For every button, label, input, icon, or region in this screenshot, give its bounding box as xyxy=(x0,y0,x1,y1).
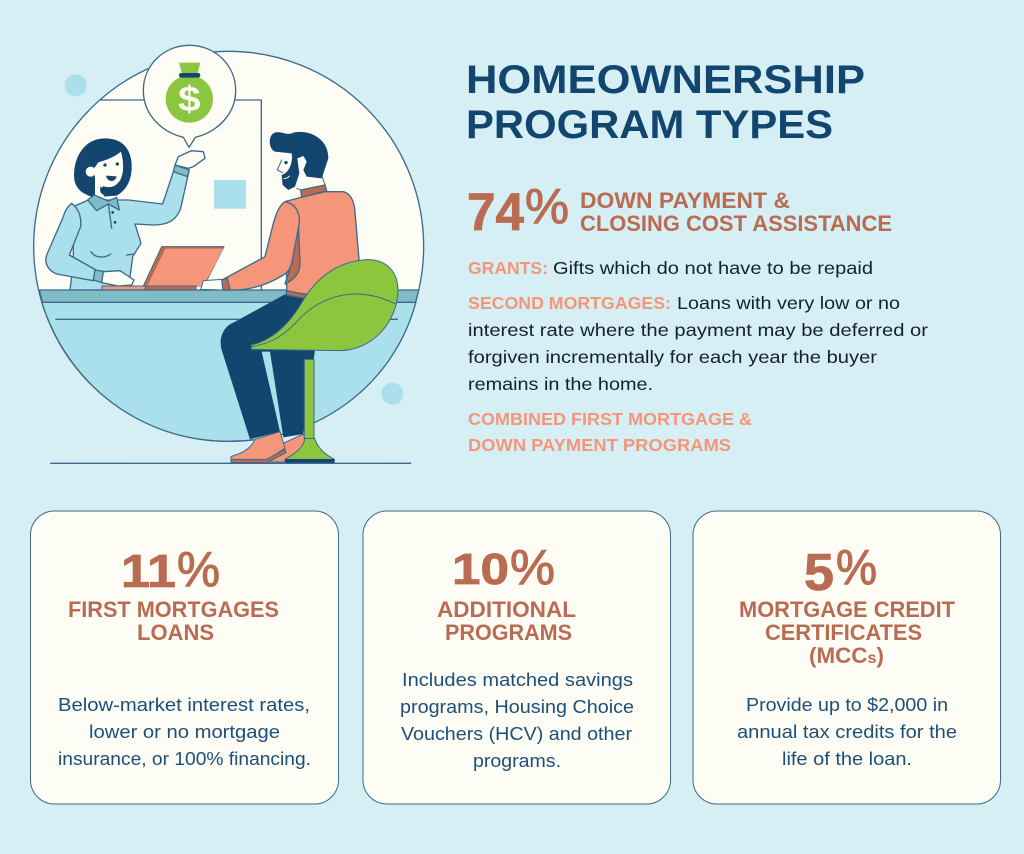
panel: additional programs: Includes matched savings xyxy=(402,669,633,690)
panel: first mortgage loans xyxy=(30,511,338,804)
panel: first mortgage loans: lower or no mortgage xyxy=(89,721,280,742)
shoes xyxy=(231,432,307,463)
heading: down payment and closing cost assistance: DOWN PAYMENT & xyxy=(580,188,790,213)
text: second mortgages xyxy=(468,293,928,394)
panel: first mortgage loans: LOANS xyxy=(137,620,214,645)
text: grants: GRANTS: xyxy=(468,258,548,278)
panel: additional programs: % xyxy=(510,541,555,595)
text: combined programs xyxy=(468,409,752,455)
icon: decorative dots xyxy=(65,74,403,405)
panel: additional programs: Vouchers (HCV) and other xyxy=(401,723,632,744)
panel: additional programs: 10 xyxy=(452,545,509,594)
stat: 74%: % xyxy=(525,180,569,234)
panel: mortgage credit certificates: MORTGAGE CREDIT xyxy=(739,597,956,622)
illustration: two people at a desk xyxy=(34,45,424,463)
panel: additional programs: programs, Housing Choice xyxy=(400,696,634,717)
panel: mortgage credit certificates: life of the loan. xyxy=(782,748,912,769)
title xyxy=(466,58,865,147)
text: second mortgages: forgiven incrementally for each year the buyer xyxy=(468,347,877,367)
heading: down payment and closing cost assistance: CLOSING COST ASSISTANCE xyxy=(580,211,892,236)
stat: 74% xyxy=(467,180,569,242)
panel: additional programs xyxy=(363,511,670,804)
panel: additional programs: programs. xyxy=(473,750,561,771)
stool xyxy=(251,260,398,463)
text: combined programs: COMBINED FIRST MORTGAGE & xyxy=(468,409,752,429)
text: second mortgages: SECOND MORTGAGES: xyxy=(468,293,671,313)
panel: additional programs: PROGRAMS xyxy=(445,620,572,645)
panel: mortgage credit certificates: % xyxy=(836,541,877,595)
panel: first mortgage loans: FIRST MORTGAGES xyxy=(68,597,279,622)
woman xyxy=(46,138,205,290)
text: grants xyxy=(468,258,873,278)
laptop xyxy=(102,247,224,290)
text: second mortgages: Loans with very low or no xyxy=(677,293,900,313)
man xyxy=(201,132,359,439)
text: second mortgages: remains in the home. xyxy=(468,374,653,394)
panel: mortgage credit certificates: (MCCs) xyxy=(809,643,884,668)
panel: mortgage credit certificates: Provide up to $2,000 in xyxy=(746,694,948,715)
scene circle xyxy=(34,51,424,441)
panel: mortgage credit certificates: CERTIFICATES xyxy=(765,620,922,645)
speech bubble with money bag: $ xyxy=(178,80,201,119)
panel: first mortgage loans: Below-market interest rates, xyxy=(58,694,310,715)
panel: first mortgage loans: insurance, or 100% financing. xyxy=(58,748,311,769)
floor line xyxy=(51,461,411,465)
desk xyxy=(39,290,419,319)
panel: mortgage credit certificates xyxy=(693,511,1000,804)
text: combined programs: DOWN PAYMENT PROGRAMS xyxy=(468,435,731,455)
heading: down payment and closing cost assistance xyxy=(580,188,892,236)
stat: 74%: 74 xyxy=(467,183,525,242)
speech bubble with money bag xyxy=(143,45,236,147)
title: PROGRAM TYPES xyxy=(466,103,833,147)
text: grants: Gifts which do not have to be repaid xyxy=(553,258,873,278)
text: second mortgages: interest rate where the payment may be deferred or xyxy=(468,320,928,340)
panel: first mortgage loans: 11 xyxy=(121,545,176,597)
panel: additional programs: ADDITIONAL xyxy=(437,597,576,622)
panel: mortgage credit certificates: annual tax credits for the xyxy=(737,721,957,742)
panel: mortgage credit certificates: 5 xyxy=(804,544,834,602)
title: HOMEOWNERSHIP xyxy=(466,58,865,102)
panel: first mortgage loans: % xyxy=(177,543,220,597)
